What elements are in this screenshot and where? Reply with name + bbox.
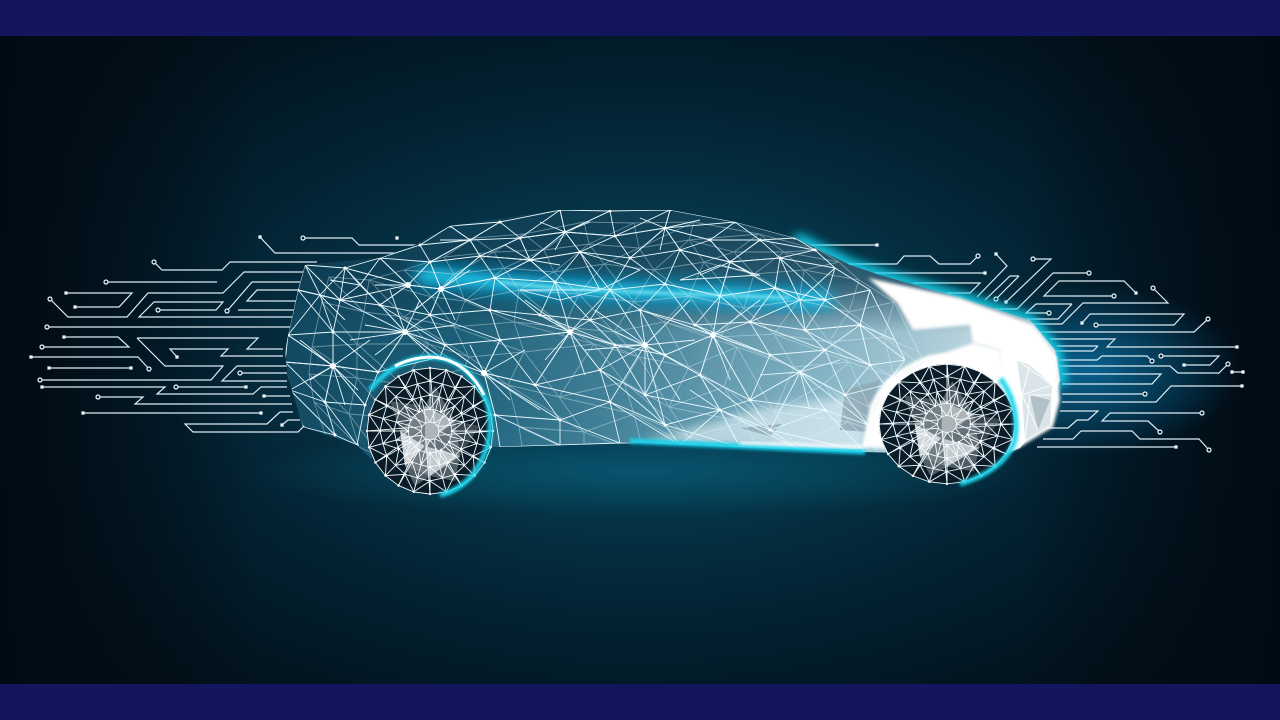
rear wheel arch highlight (395, 357, 484, 395)
rear light streak (308, 298, 345, 306)
gray facets near front arch (740, 380, 880, 436)
rear circuit end nodes (31, 236, 397, 425)
bright core of streak (500, 282, 790, 298)
front wheel (871, 357, 1023, 491)
glow behind front circuit lines (940, 285, 1240, 455)
front circuit end nodes (877, 245, 1243, 452)
white band over front arch (865, 343, 1005, 450)
cyan streak along beltline (420, 275, 830, 300)
outer cyan glow on hood (795, 238, 1062, 385)
sill highlight (740, 443, 865, 447)
sill glow (630, 441, 865, 452)
front wheel arch highlight (865, 357, 1000, 447)
rear wheel arch glow (370, 357, 490, 495)
blue streak haze (415, 275, 830, 300)
bottom bar (0, 684, 1280, 720)
mesh nodes (285, 210, 870, 445)
rear wheel (360, 361, 500, 501)
lower body highlights (640, 395, 865, 452)
mesh lines (285, 210, 929, 464)
mesh hub nodes (333, 285, 713, 373)
top bar (0, 0, 1280, 36)
front bumper low-poly panel (1017, 360, 1052, 440)
car body fill (280, 205, 1065, 464)
glow beneath car (240, 427, 1040, 517)
rear circuit lines (31, 236, 417, 432)
front circuit lines (808, 245, 1243, 452)
white hood and fender (868, 278, 1060, 456)
front wheel arch glow (960, 378, 1016, 484)
wireframe car (280, 205, 1065, 501)
